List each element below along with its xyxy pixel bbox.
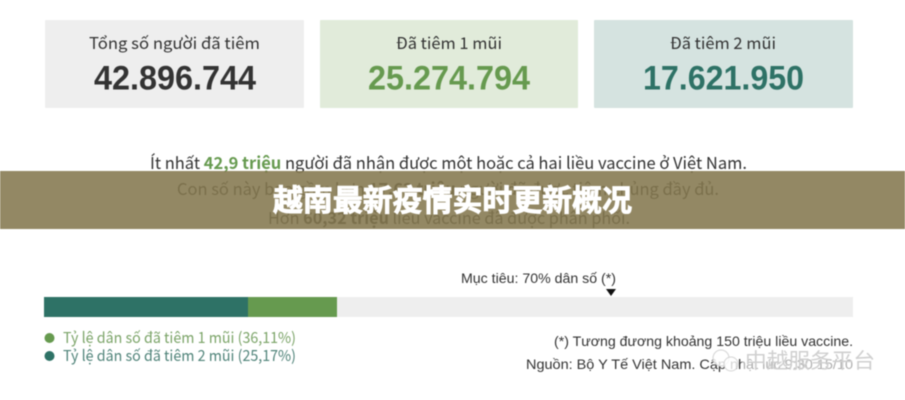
panel: total vaccinated: Tổng số người đã tiêm bbox=[89, 30, 260, 54]
target label: Mục tiêu: 70% dân số (*) bbox=[461, 271, 616, 286]
panel: two doses: Đã tiêm 2 mũi bbox=[670, 30, 776, 54]
footnote and source bbox=[526, 333, 853, 372]
icon: target marker bbox=[606, 289, 616, 296]
panel: one dose bbox=[320, 20, 578, 108]
panel: total vaccinated bbox=[45, 20, 304, 108]
footnote and source: (*) Tương đương khoảng 150 triệu liều vaccine. bbox=[554, 333, 853, 349]
panel: two doses: 17.621.950 bbox=[643, 60, 804, 98]
text block: summary: Hơn 60,32 triệu liều vaccine đã được phân phối. bbox=[268, 205, 630, 229]
title banner: 越南最新疫情实时更新概况 bbox=[273, 185, 632, 218]
panel: two doses bbox=[594, 20, 853, 108]
text block: summary: Con số này bao gồm hơn 17,62 triệu người đã được tiêm chủng đầy đủ. bbox=[177, 176, 719, 200]
legend: Tỷ lệ dân số đã tiêm 2 mũi (25,17%) bbox=[63, 345, 296, 366]
title banner bbox=[0, 171, 905, 229]
legend bbox=[44, 327, 296, 366]
footnote and source: Nguồn: Bộ Y Tế Việt Nam. Cập nhật lúc 9:30 15/10 bbox=[526, 356, 853, 372]
text block: summary bbox=[150, 150, 747, 229]
watermark: 中越服务平台 bbox=[745, 350, 875, 373]
legend: Tỷ lệ dân số đã tiêm 1 mũi (36,11%) bbox=[63, 327, 296, 348]
panel: one dose: 25.274.794 bbox=[368, 60, 530, 98]
panel: total vaccinated: 42.896.744 bbox=[94, 60, 256, 98]
text block: summary: Ít nhất 42,9 triệu người đã nhận được một hoặc cả hai liều vaccine ở Việt Nam. bbox=[150, 150, 747, 174]
progress bar bbox=[44, 297, 853, 317]
panel: one dose: Đã tiêm 1 mũi bbox=[396, 30, 502, 54]
